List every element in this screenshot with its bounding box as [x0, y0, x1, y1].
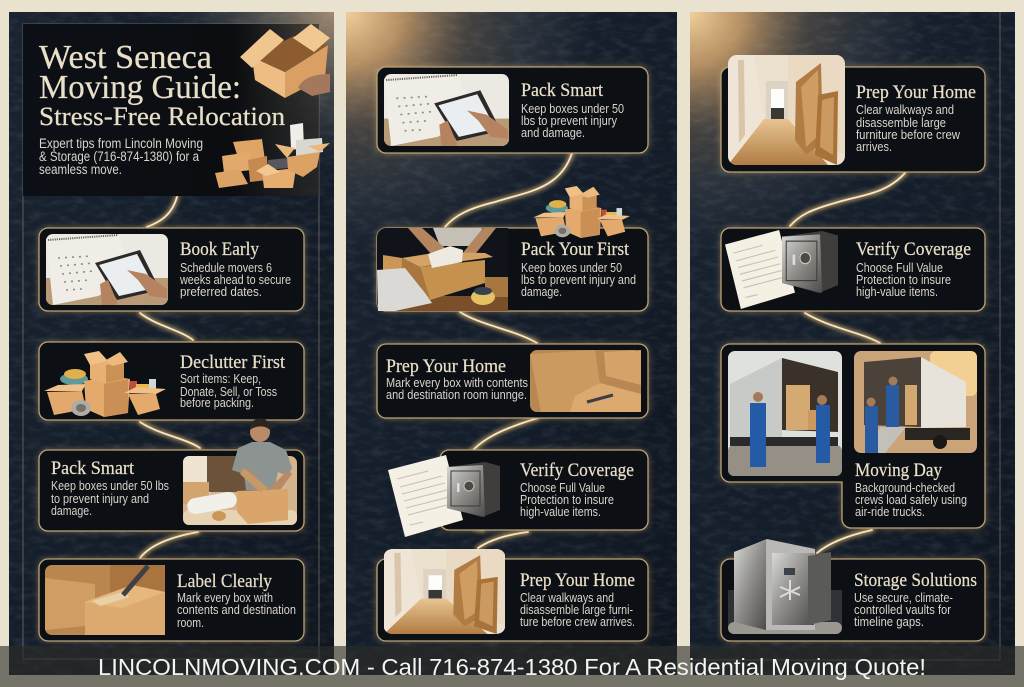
text: Label Clearly: room.: [177, 616, 204, 630]
text: Moving Day: [855, 460, 967, 519]
image: document: [388, 455, 463, 537]
text: Pack Smart: Keep boxes under 50: [521, 102, 624, 116]
footer banner: [0, 646, 1024, 687]
image: man packing a box: [183, 418, 297, 525]
text: Pack Smart: Keep boxes under 50 lbs: [51, 479, 169, 493]
text: Prep Your Home: [856, 82, 976, 154]
text: Book Early: [179, 239, 291, 299]
text: Prep Your Home: furniture before crew: [856, 128, 961, 142]
icon: stack of boxes: [215, 123, 330, 188]
text: Declutter First: Declutter First: [180, 352, 286, 373]
text: Declutter First: Sort items: Keep,: [180, 372, 261, 386]
panel: Prep Your Home (marking boxes): [377, 344, 648, 418]
text: Verify Coverage: Choose Full Value: [856, 261, 943, 275]
text: Label Clearly: Label Clearly: [177, 571, 272, 592]
image: hallway: [384, 549, 505, 634]
text: Pack Smart: [51, 458, 169, 518]
text: Prep Your Home: Prep Your Home: [386, 356, 506, 377]
panel: column 1 background: [9, 12, 334, 675]
icon: box pile: [44, 351, 166, 417]
subtitle: & Storage (716-874-1380) for a: [39, 149, 199, 164]
text: Pack Your First: Pack Your First: [521, 239, 630, 260]
image: document: [725, 230, 795, 309]
text: Pack Your First: damage.: [521, 285, 562, 299]
image: calendar and tablet: [46, 234, 168, 305]
title: West Seneca: [39, 39, 212, 76]
text: Pack Smart: lbs to prevent injury: [521, 114, 618, 128]
image: crew on ramp: [854, 351, 977, 453]
text: Declutter First: before packing.: [180, 396, 254, 410]
text: Verify Coverage: Verify Coverage: [520, 460, 634, 481]
text: Book Early: Book Early: [180, 239, 259, 260]
text: Storage Solutions: Storage Solutions: [854, 570, 977, 591]
icon: safe: [782, 231, 838, 293]
subtitle: Expert tips from Lincoln Moving: [39, 136, 203, 151]
text: Label Clearly: Mark every box with: [177, 591, 273, 605]
text: Prep Your Home: ture before crew arrives.: [520, 615, 635, 629]
text: Prep Your Home: Prep Your Home: [856, 82, 976, 103]
panel: Moving Day: [721, 344, 985, 528]
text: Book Early: Schedule movers 6: [180, 261, 272, 275]
panel: Verify Coverage (column 3): [721, 228, 985, 311]
footer banner: LINCOLNMOVING.COM - Call 716-874-1380 For A Residential Moving Quote!: [98, 654, 926, 680]
panel: Pack Smart: [39, 418, 304, 531]
text: Pack Smart: Pack Smart: [521, 80, 604, 101]
panel: Prep Your Home (hallway): [377, 549, 648, 641]
text: Pack Smart: and damage.: [521, 126, 585, 140]
text: Pack Your First: [521, 239, 636, 299]
text: Prep Your Home: [520, 570, 635, 629]
subtitle: seamless move.: [39, 162, 122, 177]
panel: Label Clearly: [39, 559, 304, 641]
title: Stress-Free Relocation: [39, 102, 285, 131]
text: Verify Coverage: high-value items.: [520, 505, 601, 519]
text: Label Clearly: contents and destination: [177, 603, 296, 617]
text: Verify Coverage: high-value items.: [856, 285, 938, 299]
text: Prep Your Home: arrives.: [856, 140, 892, 154]
image: crew loading truck: [728, 351, 842, 476]
text: Pack Smart: damage.: [51, 504, 92, 518]
icon: box pile: [533, 186, 630, 238]
title: Moving Guide:: [39, 69, 241, 106]
text: Storage Solutions: timeline gaps.: [854, 615, 924, 629]
panel: column 2 background: [346, 12, 677, 675]
title: [39, 39, 285, 131]
connector paths: [140, 153, 905, 558]
text: Verify Coverage: [856, 239, 971, 299]
text: Label Clearly: [177, 571, 296, 630]
panel: Pack Smart (column 2): [377, 67, 648, 153]
image: labelled boxes and pen: [530, 350, 641, 412]
subtitle: [39, 136, 203, 177]
text: Pack Smart: to prevent injury and: [51, 492, 149, 506]
panel: Storage Solutions: [721, 539, 985, 641]
icon: open cardboard box: [240, 24, 330, 98]
text: Declutter First: Donate, Sell, or Toss: [180, 385, 277, 399]
text: Pack Smart: [521, 80, 624, 140]
text: Verify Coverage: Choose Full Value: [520, 481, 605, 495]
text: Moving Day: Moving Day: [855, 460, 942, 481]
text: Prep Your Home: disassemble large furni-: [520, 603, 633, 617]
text: Declutter First: [180, 352, 286, 410]
text: Prep Your Home: Mark every box with contents: [386, 376, 528, 390]
text: Prep Your Home: [386, 356, 528, 402]
panel: Verify Coverage (column 2): [388, 450, 648, 537]
text: Prep Your Home: Prep Your Home: [520, 570, 635, 591]
text: Verify Coverage: Protection to insure: [856, 273, 951, 287]
text: Book Early: weeks ahead to secure: [179, 273, 291, 287]
panel: Book Early: [39, 228, 304, 311]
text: Storage Solutions: Use secure, climate-: [854, 591, 953, 605]
text: Verify Coverage: Protection to insure: [520, 493, 614, 507]
text: Moving Day: crews load safely using: [855, 493, 967, 507]
panel: column 3 background: [690, 12, 1015, 675]
image: calendar and tablet: [384, 74, 509, 146]
panel: Prep Your Home (column 3): [721, 55, 985, 172]
text: Prep Your Home: and destination room iunnge.: [386, 388, 527, 402]
text: Prep Your Home: Clear walkways and: [520, 591, 614, 605]
image: wrapping items in a box: [377, 228, 508, 311]
text: Storage Solutions: [854, 570, 977, 629]
text: Prep Your Home: Clear walkways and: [856, 103, 954, 117]
text: Verify Coverage: [520, 460, 634, 519]
panel: Pack Your First: [377, 186, 648, 311]
text: Pack Your First: Keep boxes under 50: [521, 261, 622, 275]
text: Book Early: preferred dates.: [180, 285, 262, 299]
panel: header: [23, 24, 330, 196]
icon: safe: [447, 462, 500, 517]
text: Pack Smart: Pack Smart: [51, 458, 135, 479]
text: Verify Coverage: Verify Coverage: [856, 239, 971, 260]
text: Prep Your Home: disassemble large: [856, 116, 946, 130]
image: labelling a box: [45, 565, 165, 635]
panel: Declutter First: [39, 342, 304, 420]
text: Moving Day: Background-checked: [855, 481, 955, 495]
text: Pack Your First: lbs to prevent injury and: [521, 273, 636, 287]
image: hallway: [728, 55, 845, 165]
image: storage vault: [728, 539, 842, 634]
text: Storage Solutions: controlled vaults for: [854, 603, 951, 617]
text: Moving Day: air-ride trucks.: [855, 505, 925, 519]
